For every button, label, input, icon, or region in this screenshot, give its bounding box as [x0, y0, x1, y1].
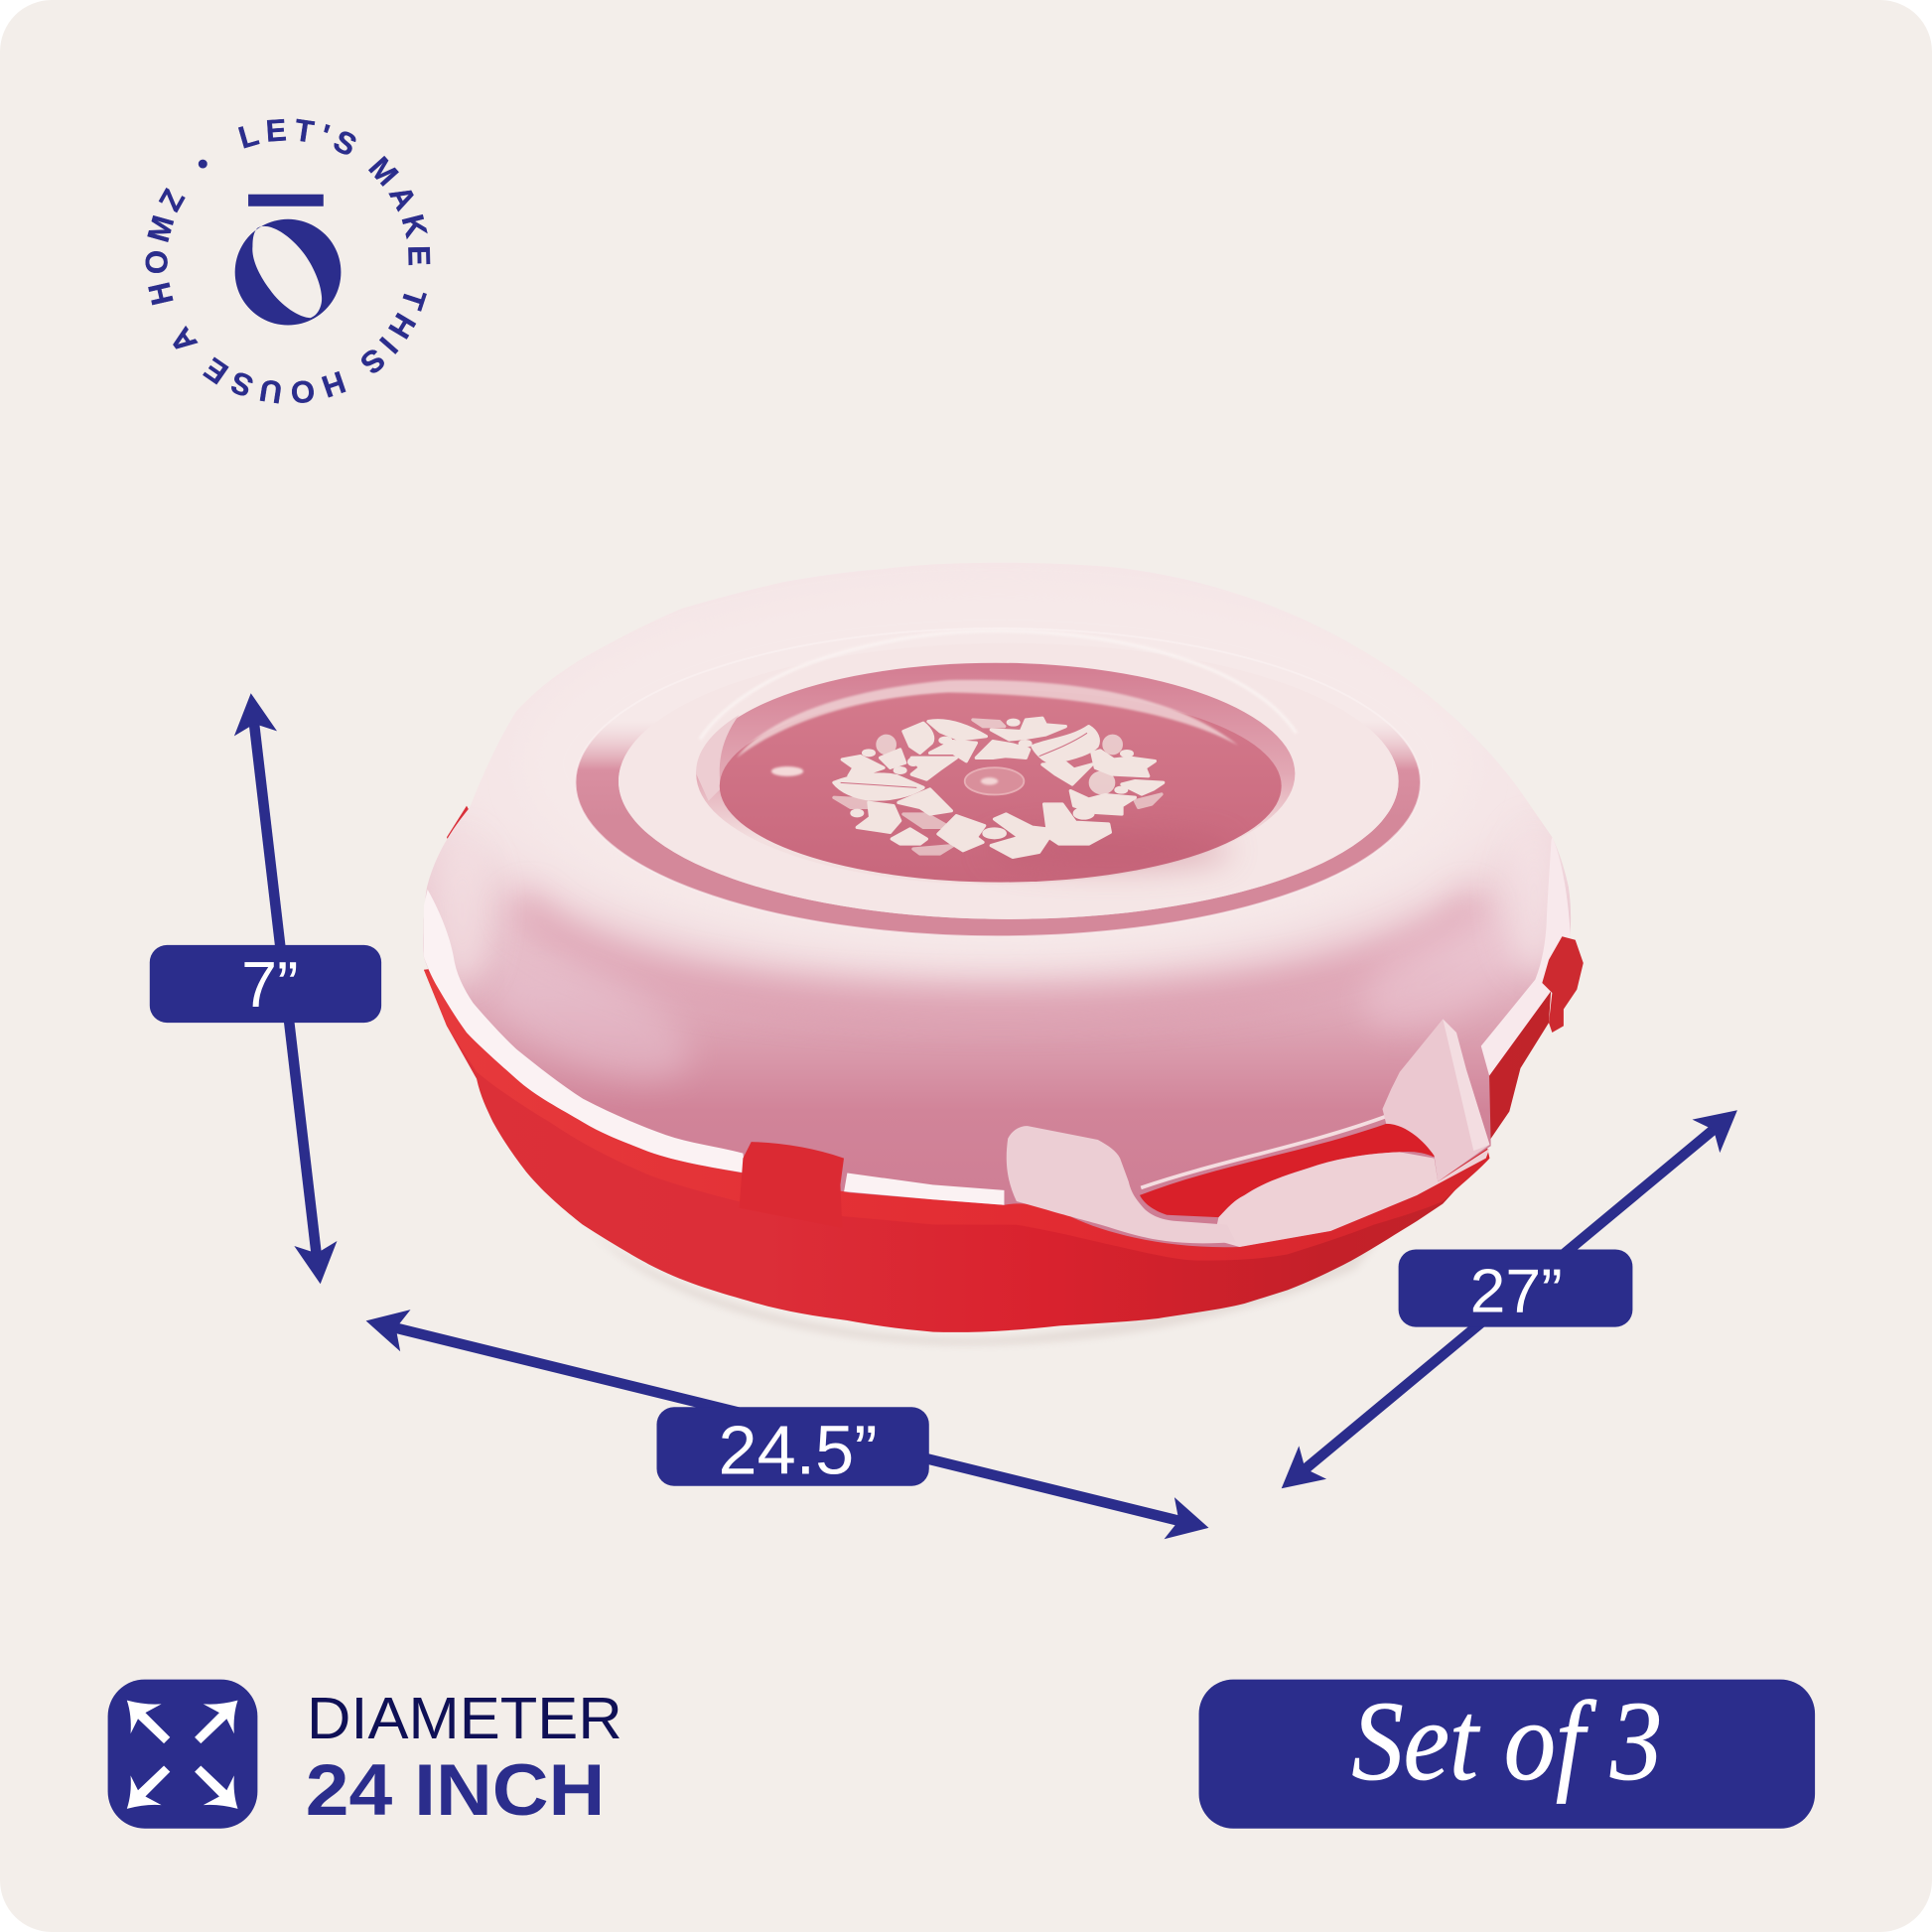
- lid lower rim white band: [424, 890, 746, 1173]
- height arrow with 7 inch label: [150, 691, 381, 1287]
- depth arrow: [1268, 1093, 1751, 1505]
- logo letter O: [235, 219, 341, 326]
- bowl rim band: [424, 970, 1489, 1261]
- glass bright arc: [700, 630, 1297, 740]
- inner frosted ring: [619, 643, 1399, 919]
- lid handle grip band: [1213, 1149, 1489, 1247]
- set of 3 badge: Set of 3: [1351, 1678, 1662, 1804]
- lid right tab: [1382, 1019, 1489, 1181]
- width arrow: [360, 1300, 1214, 1549]
- logo ring text: LET'S MAKE THIS HOUSE A HOMZ: [145, 119, 431, 403]
- left small clip: [447, 806, 471, 850]
- red bowl: [424, 961, 1552, 1332]
- lid left tab: [1007, 1126, 1236, 1243]
- soft shadow under bowl: [592, 1232, 1380, 1345]
- lens crescent highlight: [737, 680, 1238, 758]
- depth arrow with 27 inch label: [1268, 1093, 1751, 1505]
- height label: 7”: [241, 949, 298, 1021]
- central window: [720, 690, 1282, 883]
- wreath decoration: [834, 718, 1164, 857]
- icon: expand arrows: [108, 1680, 257, 1829]
- width label: [656, 1407, 929, 1488]
- product: red wreath storage container with clear lid: [423, 655, 1584, 1346]
- lid right rim band: [1481, 837, 1571, 1075]
- height arrow: [229, 691, 342, 1287]
- logo dot: [199, 160, 207, 169]
- center hub: [965, 767, 1024, 794]
- depth label: 27”: [1470, 1258, 1563, 1326]
- lid slot opening showing red base: [1140, 1124, 1436, 1217]
- depth label: [1399, 1249, 1632, 1327]
- lid shading layers: [433, 768, 1569, 1086]
- logo: circular brand mark: [145, 119, 431, 403]
- set of 3 badge: [1199, 1678, 1815, 1829]
- left front latch: [740, 1142, 844, 1228]
- diameter value: 24 INCH: [306, 1749, 605, 1831]
- right side latch: [1542, 936, 1584, 1033]
- diameter label: DIAMETER: [307, 1685, 622, 1751]
- logo macron bar: [248, 195, 324, 207]
- width label: 24.5”: [719, 1411, 878, 1488]
- width arrow with 24.5 inch label: [360, 1300, 1214, 1549]
- lid body: [423, 563, 1571, 1247]
- lid glass groove ring: [576, 628, 1421, 936]
- diameter callout: [108, 1680, 622, 1831]
- glass lens ring: [696, 663, 1295, 885]
- height label: [150, 945, 381, 1023]
